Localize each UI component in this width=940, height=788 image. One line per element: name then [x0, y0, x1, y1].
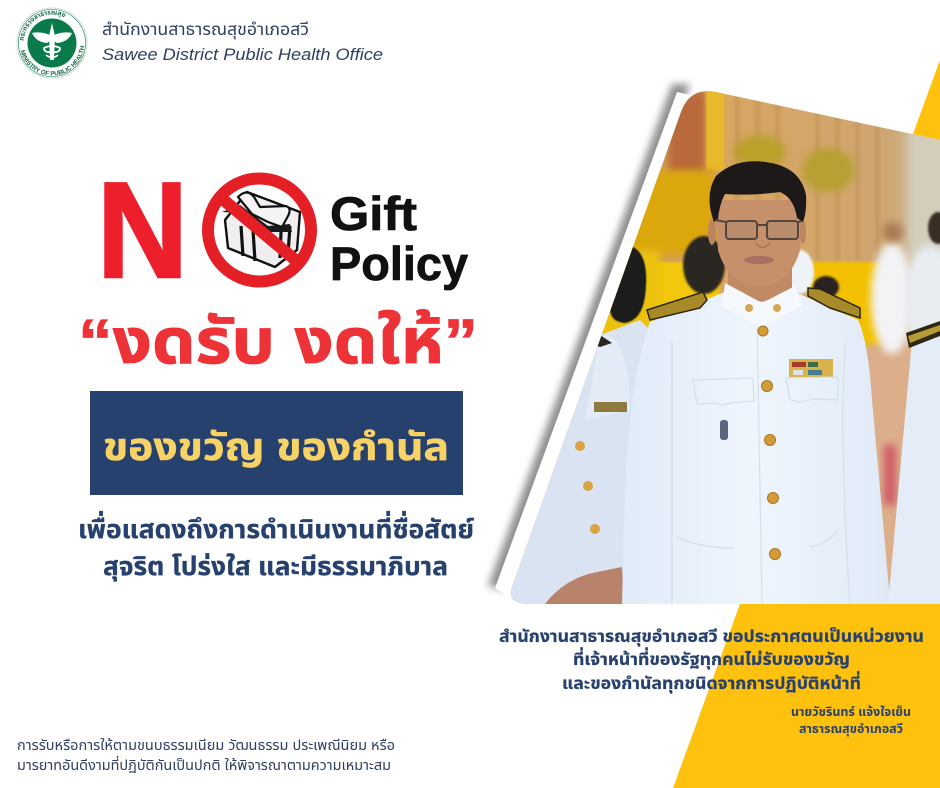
header: office name: สำนักงานสาธารณสุขอำเภอสวี — [102, 20, 309, 40]
subheading — [78, 511, 474, 582]
left colleague — [510, 246, 648, 604]
face — [716, 200, 801, 270]
white photo frame strip — [495, 92, 694, 604]
collar — [722, 283, 802, 326]
signature: นายวัชรินทร์ แจ้งใจเย็น — [791, 705, 911, 719]
main figure — [622, 161, 890, 606]
Gift Policy wordmark: Gift — [330, 187, 417, 240]
navy banner — [90, 391, 463, 495]
icon: gift box crossed out — [208, 178, 311, 282]
buttons — [758, 326, 780, 560]
footnote — [17, 737, 395, 773]
declaration text — [499, 626, 924, 694]
logo: Ministry of Public Health: MINISTRY OF PUBLIC HEALTH — [20, 46, 84, 76]
yellow corner top right — [913, 60, 940, 140]
headline: “งดรับ งดให้” — [78, 307, 478, 377]
No Gift Policy logo — [97, 154, 468, 306]
sleeve seams — [672, 340, 850, 604]
right colleague — [888, 321, 940, 604]
logo: Ministry of Public Health — [16, 8, 88, 78]
footnote: มารยาทอันดีงามที่ปฏิบัติกันเป็นปกติ ให้พิจารณาตามความเหมาะสม — [17, 755, 391, 773]
header: office name: Sawee District Public Health Office — [102, 45, 383, 64]
letter N: N — [97, 154, 188, 306]
subheading: เพื่อแสดงถึงการดำเนินงานที่ซื่อสัตย์ — [78, 511, 474, 544]
yellow panel bottom right — [673, 604, 940, 788]
jacket — [622, 292, 890, 606]
photo shadow strip — [488, 84, 690, 590]
No Gift Policy logo: Policy — [330, 237, 468, 290]
signature — [791, 705, 911, 736]
declaration text: สำนักงานสาธารณสุขอำเภอสวี ขอประกาศตนเป็นหน่วยงาน — [499, 626, 924, 647]
footnote: การรับหรือการให้ตามขนบธรรมเนียม วัฒนธรรม ประเพณีนิยม หรือ — [17, 737, 395, 753]
epaulets — [647, 292, 707, 320]
header: office name — [102, 20, 383, 64]
photo backdrop — [500, 85, 940, 610]
glasses — [715, 220, 802, 239]
medal ribbons — [789, 359, 833, 377]
declaration text: และของกำนัลทุกชนิดจากการปฏิบัติหน้าที่ — [562, 671, 861, 694]
signature: สาธารณสุขอำเภอสวี — [799, 722, 903, 736]
blurred people behind — [683, 212, 940, 355]
banner text: ของขวัญ ของกำนัล — [103, 427, 449, 469]
placket — [757, 316, 762, 604]
pockets — [677, 377, 838, 548]
subheading: สุจริต โปร่งใส และมีธรรมาภิบาล — [103, 551, 448, 582]
nose and mouth — [756, 243, 770, 248]
pen badge — [720, 420, 728, 440]
logo ring text: กระทรวงสาธารณสุข — [20, 10, 66, 41]
photo: official in white uniform — [500, 85, 940, 610]
neck — [728, 265, 792, 302]
declaration text: ที่เจ้าหน้าที่ของรัฐทุกคนไม่รับของขวัญ — [573, 647, 850, 670]
hair — [709, 161, 806, 222]
logo caduceus emblem — [32, 23, 72, 60]
